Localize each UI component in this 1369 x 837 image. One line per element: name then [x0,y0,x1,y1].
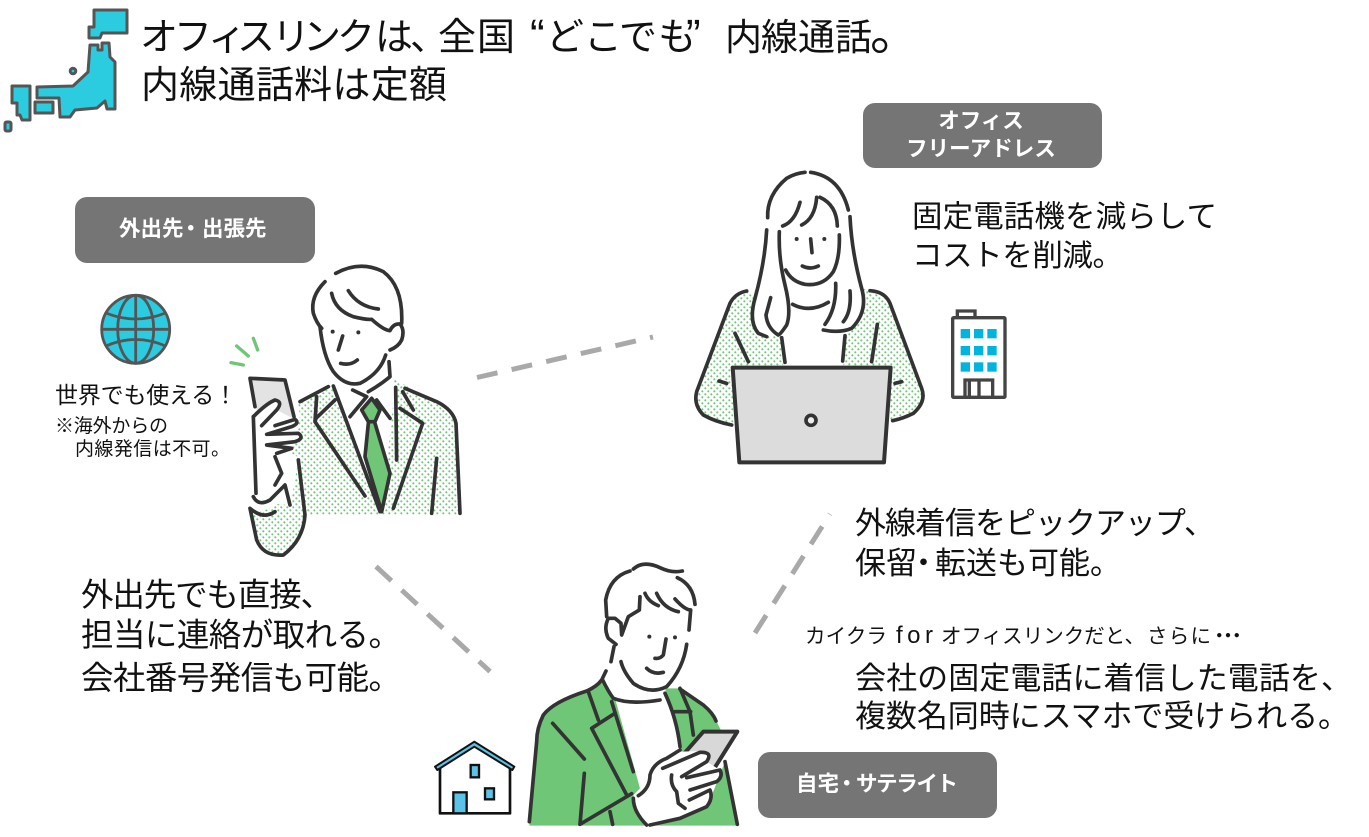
text: reduce landline cost [912,200,1217,273]
arrow: link between outside and home [376,566,490,672]
illustration: man at home with smartphone [529,564,737,826]
label: outside and business trip: 外出先 [119,217,184,241]
text: usable worldwide: 内線発信は不可。 [75,438,230,460]
text: kaikura note: さらに [1147,625,1211,648]
label: home and satellite: サテライト [856,772,958,796]
text: direct contact outside: 外出先でも直接、 [81,577,333,613]
text: kaikura note: カイクラ [805,625,887,648]
text: usable worldwide [55,382,237,460]
text: usable worldwide: ※海外からの [55,415,168,437]
label: office free address: オフィス [938,109,1024,133]
text: usable worldwide: 世界でも使える！ [55,382,237,408]
text: simultaneous ringing: 複数名同時にスマホで受けられる。 [855,699,1349,734]
icon: office building [953,311,1005,397]
illustration: woman with laptop [696,172,923,462]
text: direct contact outside: 担当に連絡が取れる。 [81,617,401,653]
text: direct contact outside: 会社番号発信も可能。 [81,660,401,696]
arrow: link between outside and office [477,337,653,378]
label: outside and business trip [75,197,315,263]
text: reduce landline cost: コストを削減。 [912,239,1123,273]
text: pickup and transfer: 保留 [855,546,917,581]
title [140,5,920,107]
label: outside and business trip: ・ [180,217,202,241]
text: simultaneous ringing: 会社の固定電話に着信した電話を、 [855,661,1352,696]
title: オフィスリンクは、全国 [140,17,515,59]
label: office free address: フリーアドレス [906,137,1056,161]
icon: house [435,742,514,813]
title: 内線通話 [725,17,872,58]
text: direct contact outside [81,577,401,696]
text: kaikura note: for [896,622,933,649]
text: reduce landline cost: 固定電話機を減らして [912,200,1217,234]
text: pickup and transfer [855,506,1215,581]
label: outside and business trip: 出張先 [202,217,267,241]
icon: Japan map [5,10,127,131]
text: simultaneous ringing [855,661,1352,734]
title: 。 [870,5,920,61]
text: pickup and transfer: ・ [908,546,939,581]
icon: globe [102,295,170,363]
label: home and satellite: ・ [836,772,858,796]
text: pickup and transfer: 外線着信をピックアップ、 [855,506,1215,541]
text: pickup and transfer: 転送も可能。 [935,546,1121,581]
title: どこでも [546,17,696,59]
illustration: man with smartphone outdoors [231,266,460,555]
label: home and satellite: 自宅 [796,772,839,796]
arrow: link between office and home [755,514,830,633]
text: kaikura note: オフィスリンクだと、 [941,625,1145,648]
text: kaikura note: ・・・ [1209,625,1247,648]
label: office free address [863,103,1102,168]
title: “ [530,11,545,60]
label: home and satellite [758,752,997,818]
title: 内線通話料は定額 [141,65,447,107]
title: ” [686,11,701,60]
